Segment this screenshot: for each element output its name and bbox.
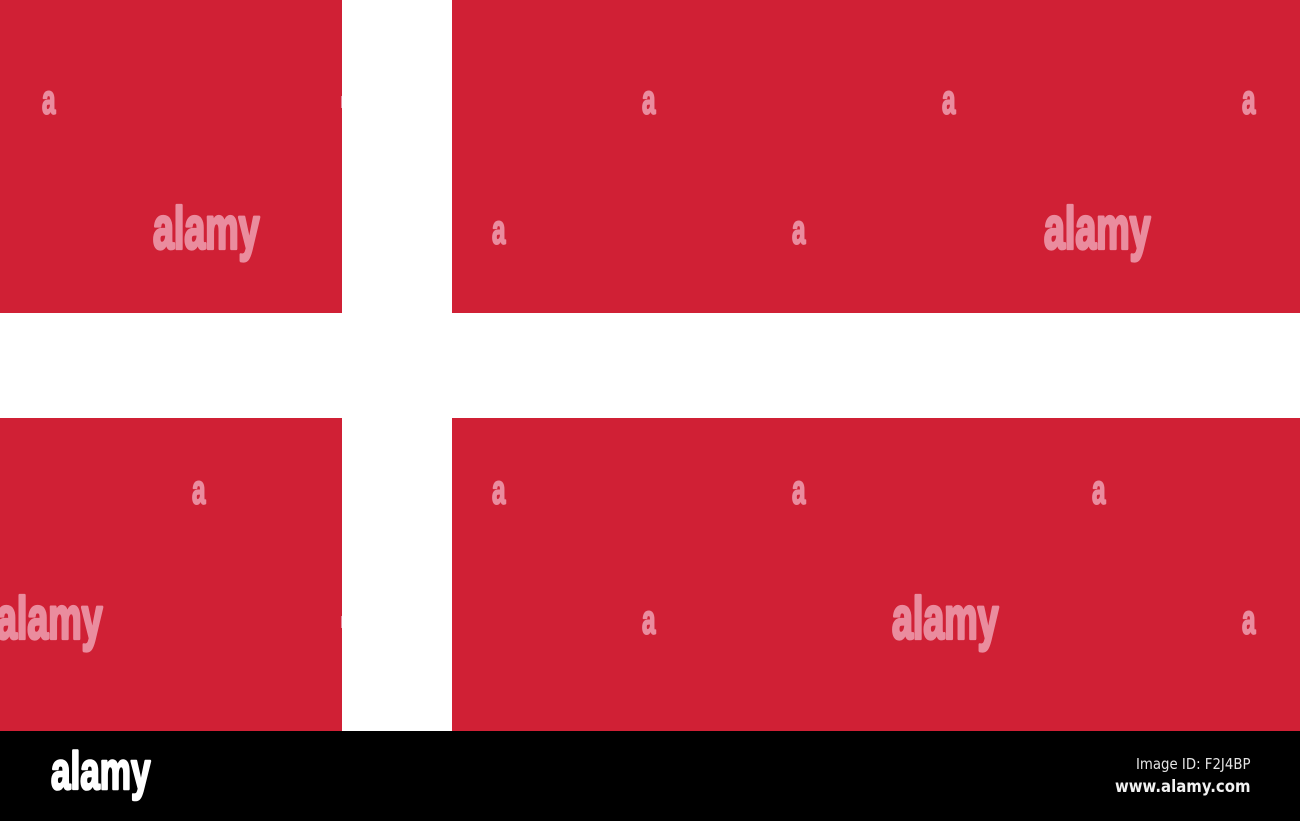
watermark: small "a" marks: a bbox=[1092, 466, 1106, 512]
footer logo: alamy: alamy bbox=[51, 742, 151, 801]
footer bar bbox=[0, 731, 1300, 821]
footer text: image ID: Image ID: F2J4BP bbox=[1136, 755, 1250, 773]
watermark: small "a" marks: a bbox=[642, 76, 656, 122]
watermark: large "alamy" wordmarks bbox=[0, 196, 1151, 652]
watermark: large "alamy" wordmarks: alamy bbox=[0, 586, 103, 652]
watermark: small "a" marks: a bbox=[1242, 596, 1256, 642]
footer text: website: www.alamy.com bbox=[1115, 777, 1250, 796]
watermark: small "a" marks: a bbox=[642, 596, 656, 642]
watermark: small "a" marks: a bbox=[942, 76, 956, 122]
watermark: large "alamy" wordmarks: alamy bbox=[892, 586, 999, 652]
watermark: small "a" marks: a bbox=[792, 206, 806, 252]
watermark: small "a" marks: a bbox=[1242, 76, 1256, 122]
watermark: large "alamy" wordmarks: alamy bbox=[1044, 196, 1151, 262]
watermark: small "a" marks: a bbox=[492, 466, 506, 512]
watermark: small "a" marks: a bbox=[492, 206, 506, 252]
watermark: small "a" marks: a bbox=[192, 466, 206, 512]
watermark: large "alamy" wordmarks: alamy bbox=[153, 196, 260, 262]
watermark: small "a" marks: a bbox=[792, 466, 806, 512]
watermark: small "a" marks: a bbox=[42, 76, 56, 122]
watermark: small "a" marks bbox=[42, 76, 1256, 642]
